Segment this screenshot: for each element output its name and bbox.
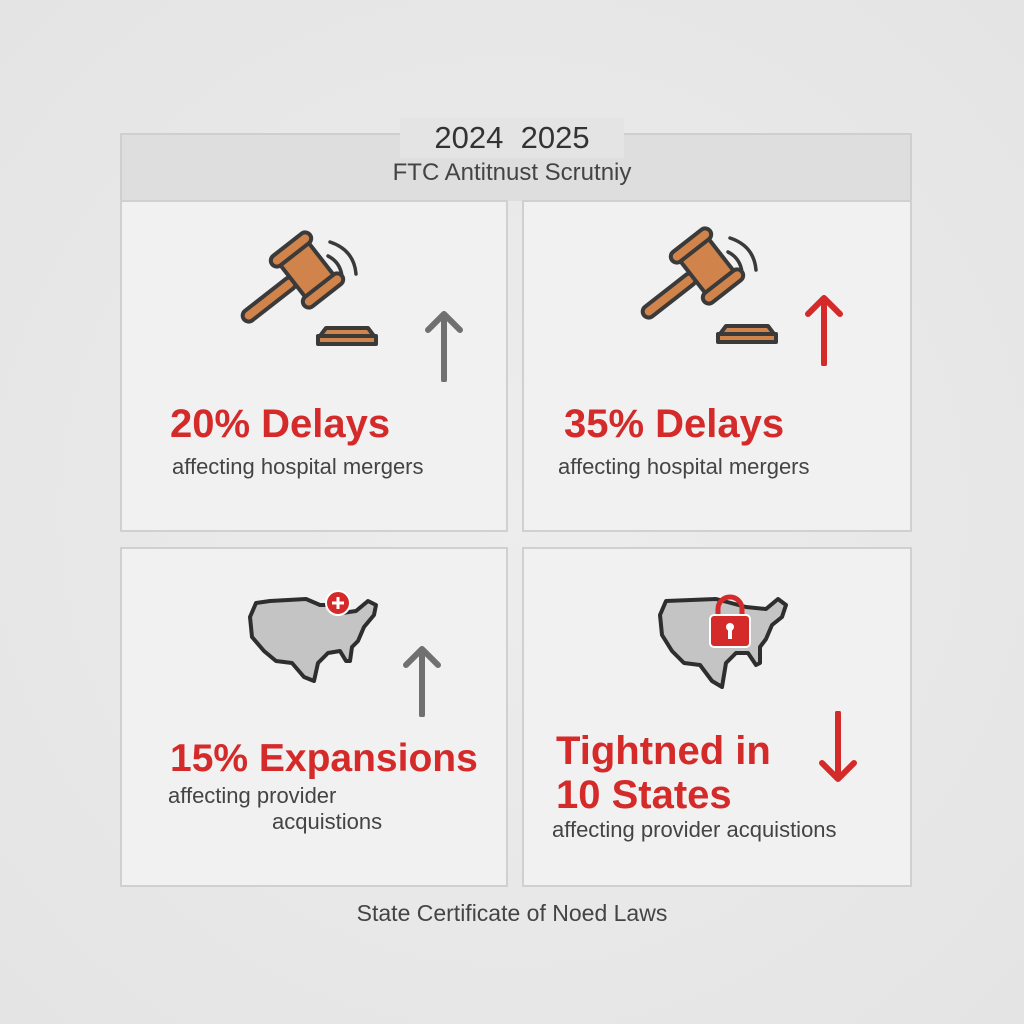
icon: US map with medical badge: [248, 590, 378, 683]
arrow up gray: [403, 646, 441, 717]
icon: US map with lock: [658, 594, 788, 689]
footer caption: State Certificate of Noed Laws: [357, 900, 667, 926]
stat: 20% Delays: [170, 402, 390, 446]
arrow down red: [819, 711, 857, 782]
stat: 35% Delays: [564, 402, 784, 446]
arrow up gray: [425, 311, 463, 382]
panel: 2024 delays: [120, 200, 508, 532]
panel: 2024 expansions: [120, 547, 508, 887]
description: affecting hospital mergers: [558, 454, 810, 479]
stat: 15% Expansions: [170, 737, 478, 780]
panel: 2025 delays: [522, 200, 912, 532]
years title: [400, 118, 624, 158]
panel: 2025 tightened: [522, 547, 912, 887]
description: affecting hospital mergers: [172, 454, 424, 479]
description: affecting provider acquistions: [552, 817, 837, 842]
stat: Tightned in: [556, 729, 771, 773]
subtitle: FTC Antitnust Scrutniy: [393, 159, 631, 186]
arrow up red: [805, 295, 843, 366]
icon: gavel: [640, 226, 778, 344]
stat: 10 States: [556, 773, 732, 817]
stat: [556, 729, 771, 817]
icon: gavel: [240, 230, 378, 346]
years title: 2024 2025: [434, 120, 590, 155]
description: [168, 783, 382, 834]
description: acquistions: [272, 809, 382, 834]
description: affecting provider: [168, 783, 336, 808]
header band: [120, 133, 912, 201]
